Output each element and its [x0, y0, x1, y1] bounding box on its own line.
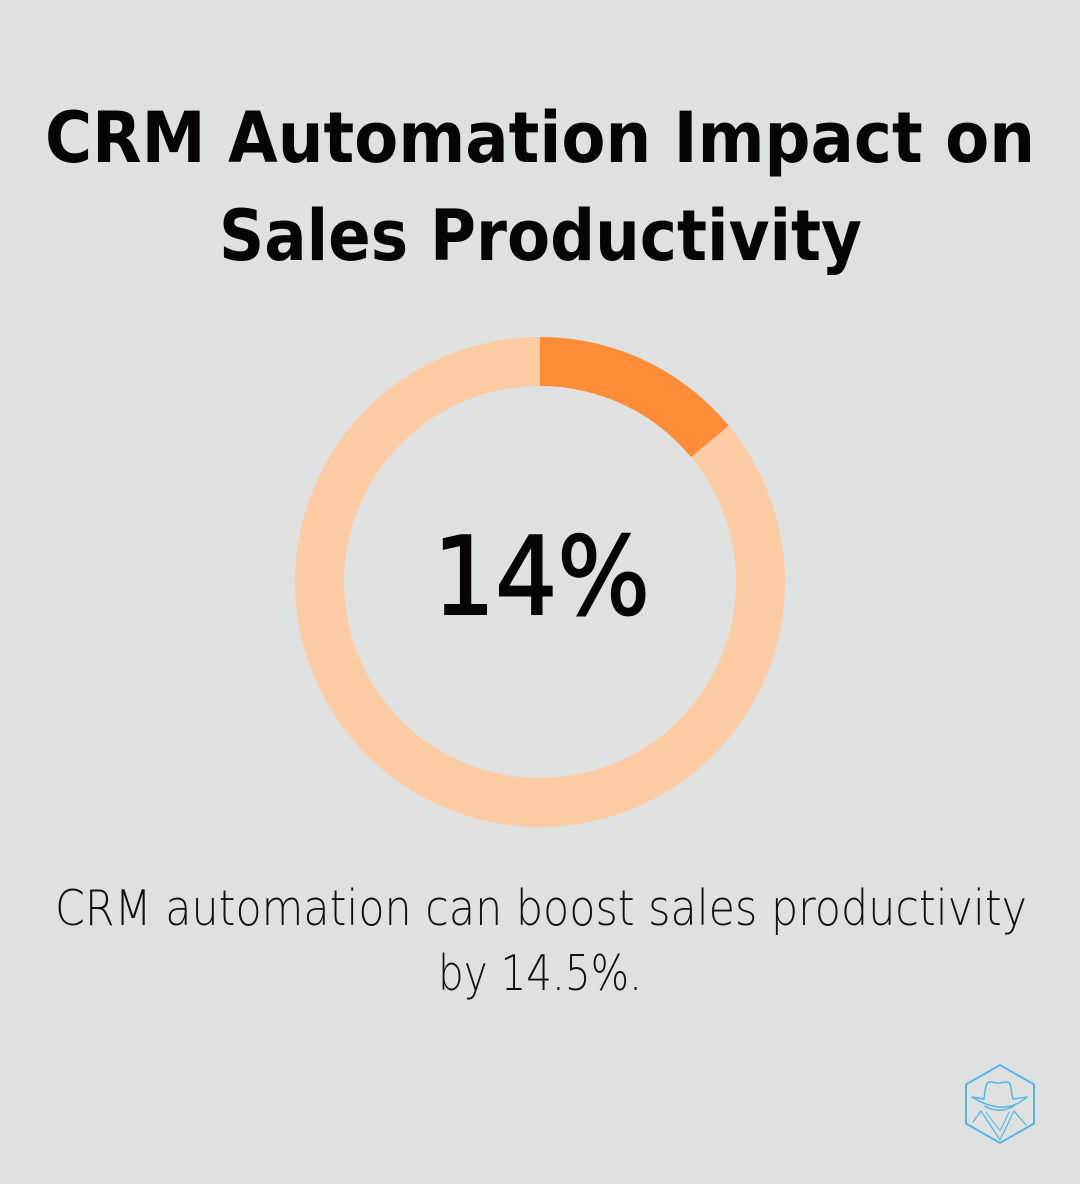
caption: by 14.5%.	[438, 945, 642, 1002]
title	[45, 97, 1035, 277]
highlighted segment	[540, 337, 729, 457]
caption	[55, 880, 1027, 1002]
donut chart: 14%	[320, 337, 760, 802]
center value: 14%	[433, 515, 650, 640]
title: Sales Productivity	[219, 195, 862, 277]
icon: logo spy in hexagon	[966, 1065, 1034, 1143]
